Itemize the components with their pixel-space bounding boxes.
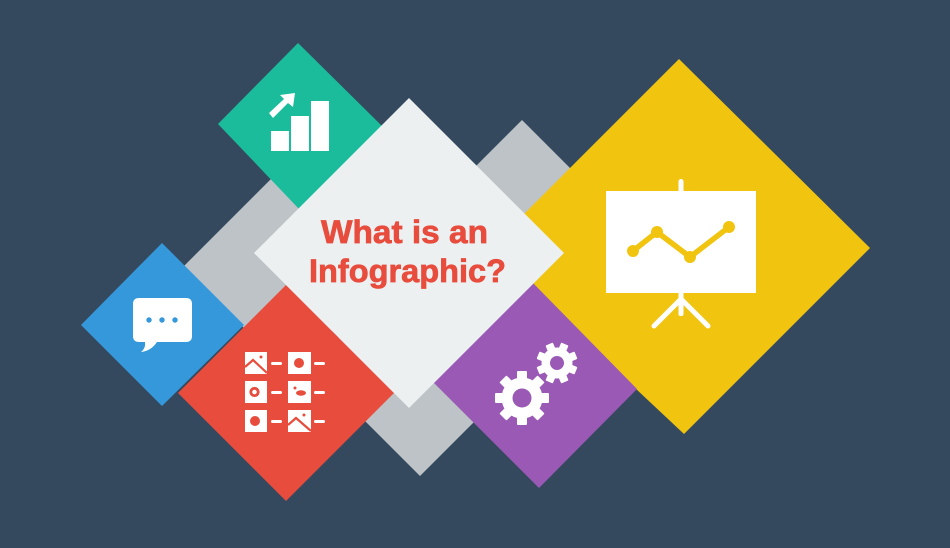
panel: purple diamond [433,282,637,488]
icon: mountain image bottom right [288,410,311,432]
icon: flower image top right [288,352,311,374]
icon: cloud image middle right [288,381,311,403]
icon: large gear [495,371,549,425]
title [309,214,506,289]
icon: gears [495,336,584,425]
panel: central diamond [254,98,564,408]
icon: growth bar chart [269,93,329,151]
icon: small gear [530,336,584,390]
icon: mountain image top left [245,352,267,374]
icon: gear image middle left [245,381,267,403]
panel: red diamond [178,285,394,501]
icon: picture list grid [245,352,325,432]
list dashes [271,362,325,423]
title: Infographic? [309,253,506,289]
panel: blue diamond [81,243,244,406]
panel: grey diamond left [183,160,397,374]
panel: grey diamond top right [404,120,640,356]
icon: presentation board [606,179,756,326]
panel: grey diamond bottom [310,256,530,476]
panel: yellow diamond [488,59,870,434]
panel: green diamond [218,43,384,210]
icon: speech bubble [133,298,192,352]
title: What is an [321,214,488,250]
icon: flower image bottom left [245,410,267,432]
